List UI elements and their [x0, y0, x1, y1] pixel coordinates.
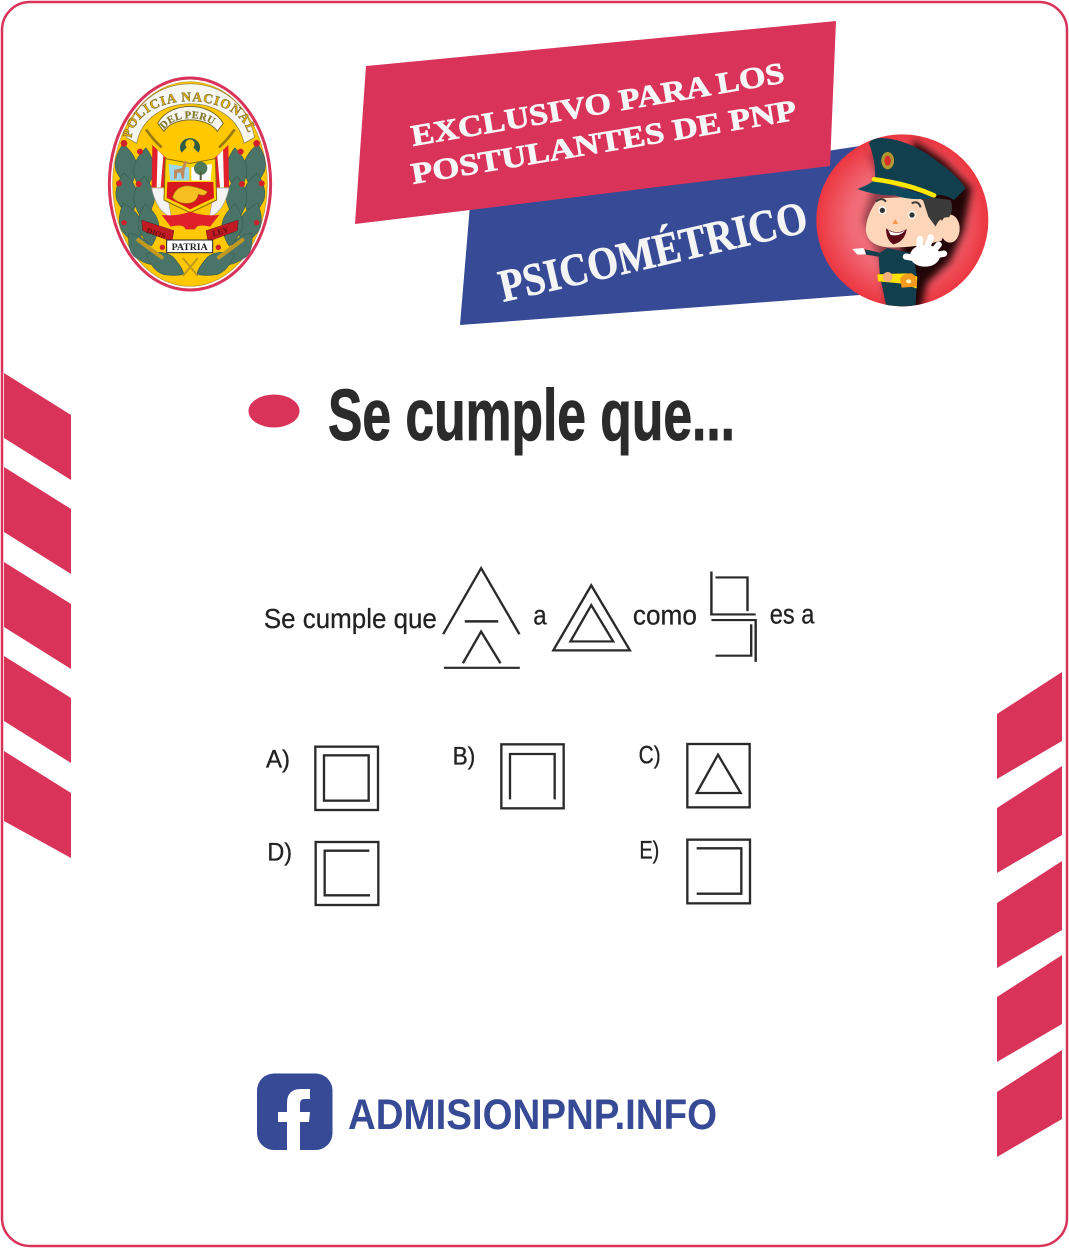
ribbon: Patria: PATRIA	[172, 242, 208, 253]
emblem: Policía Nacional del Perú	[108, 76, 272, 292]
question figure	[264, 568, 815, 668]
belt	[877, 272, 917, 288]
option B: B)	[453, 743, 475, 771]
figure: double triangle	[553, 585, 630, 650]
face	[866, 197, 943, 247]
option A	[266, 745, 378, 810]
nose	[892, 219, 898, 224]
ribbon: Ley: LEY	[211, 225, 230, 239]
option E	[639, 837, 750, 903]
wreath	[180, 138, 200, 153]
waving glove	[906, 237, 944, 267]
option B	[453, 743, 564, 808]
emblem motto: Policía Nacional: POLICIA NACIONAL	[122, 92, 255, 138]
banner text line 2: POSTULANTES DE PNP	[409, 94, 799, 191]
question text: se cumple que: Se cumple que	[264, 604, 437, 635]
website label: ADMISIONPNP.INFO	[348, 1091, 717, 1139]
emblem motto: Del Perú: DEL PERU	[159, 111, 216, 130]
banner text: psicométrico: PSICOMÉTRICO	[494, 191, 812, 312]
option C: C)	[639, 741, 661, 769]
character shadow	[900, 140, 972, 313]
body	[865, 248, 917, 311]
figure: split squares	[711, 572, 756, 662]
red banner: exclusive notice	[355, 21, 836, 224]
option D	[267, 839, 378, 905]
left decorative stripes	[4, 373, 71, 858]
pointing hand	[852, 248, 866, 255]
flags	[152, 145, 229, 217]
hair	[922, 196, 952, 227]
crossed rifles	[138, 240, 242, 275]
connector words: es a: es a	[770, 599, 815, 630]
mouth	[886, 228, 907, 244]
right decorative stripes	[997, 672, 1062, 1157]
option E: E)	[639, 837, 659, 865]
ear	[940, 215, 960, 243]
laurel branches	[112, 140, 268, 283]
eyes	[878, 206, 916, 219]
option D: D)	[267, 839, 292, 867]
ribbon: Dios: DIOS	[145, 226, 167, 241]
blue banner: psicométrico	[460, 146, 860, 325]
icon: facebook	[257, 1074, 332, 1150]
figure: split triangle	[443, 568, 520, 668]
mascot: cartoon police officer in red circle	[816, 134, 988, 313]
ribbon: Ley	[206, 220, 238, 242]
red drape	[162, 212, 219, 229]
option C	[639, 741, 750, 807]
connector word: a: a	[533, 600, 547, 631]
ribbon: Dios	[142, 220, 174, 242]
connector word: como: como	[633, 600, 697, 631]
banner text line 1: EXCLUSIVO PARA LOS	[409, 57, 787, 153]
heading: Se cumple que...	[328, 376, 735, 456]
shield	[164, 159, 217, 213]
cap	[857, 138, 966, 200]
section bullet	[248, 394, 300, 428]
answer options	[266, 741, 750, 905]
ribbon: Patria	[167, 240, 213, 253]
option A: A)	[266, 745, 290, 773]
